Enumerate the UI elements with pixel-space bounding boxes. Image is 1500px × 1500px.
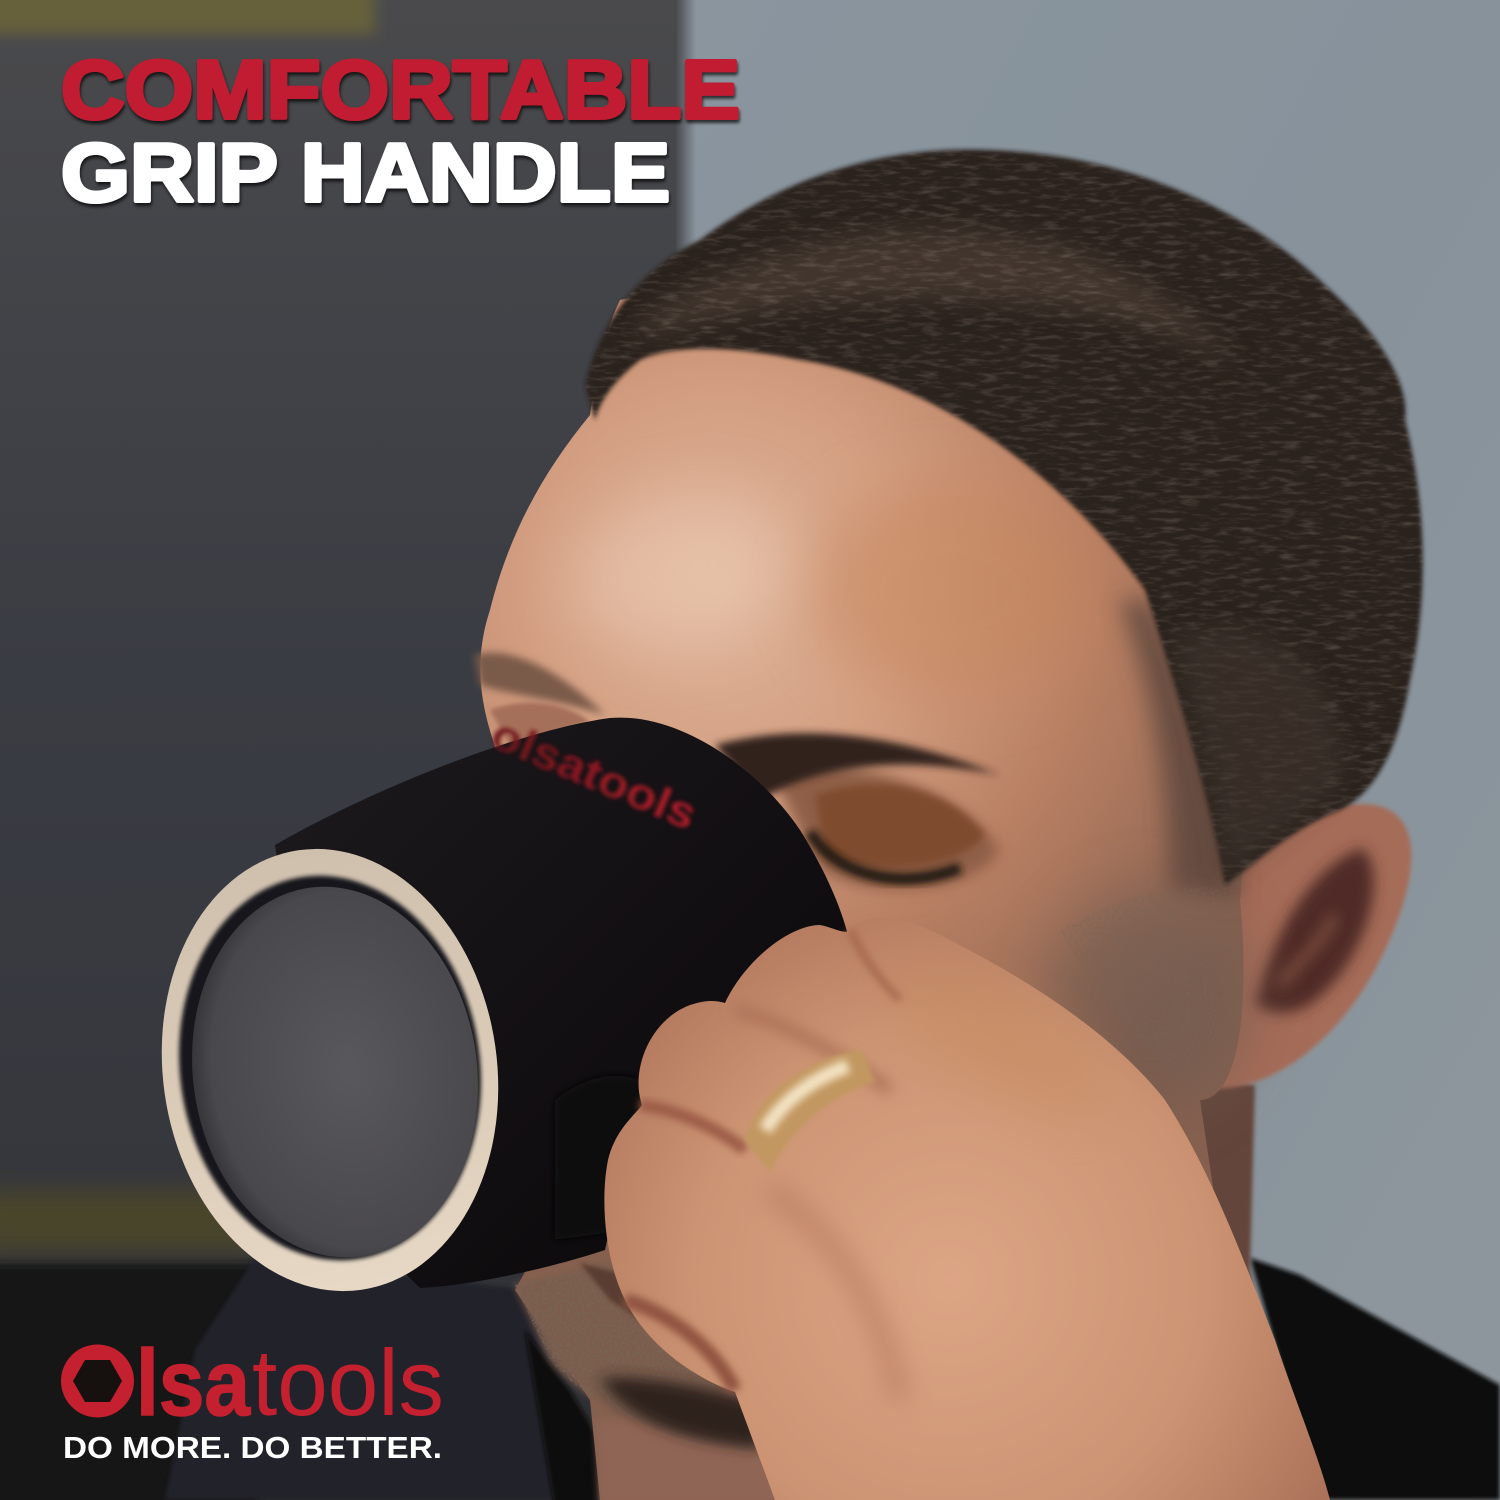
knuckle glow: [876, 945, 1124, 1135]
gold ring: [745, 1050, 875, 1172]
shirt: right shoulder: [1250, 1258, 1500, 1500]
mug body: [275, 718, 848, 1288]
forehead warm patch: [810, 480, 1090, 700]
title: [61, 43, 740, 219]
background: gold strip at top: [0, 0, 375, 34]
mug handle: [555, 1076, 650, 1240]
title line 2: GRIP HANDLE: [61, 126, 670, 219]
title line 1: COMFORTABLE: [61, 43, 740, 136]
logo: [61, 1330, 444, 1465]
eyelid: [815, 785, 985, 867]
left eye shadow: [490, 703, 590, 745]
eyebrow left: [475, 653, 605, 715]
logo hex O: [61, 1344, 134, 1418]
hair highlights: [640, 229, 1240, 370]
cheek stubble texture: [1060, 887, 1242, 1095]
eye socket: [770, 765, 1000, 890]
hand: [604, 917, 1330, 1500]
mug rim: [134, 827, 526, 1313]
neck: [1150, 1075, 1300, 1500]
chin stubble texture: [515, 1262, 770, 1450]
mug brand print: olsatools: [484, 709, 704, 839]
forehead highlight: [557, 474, 803, 666]
hair strand texture: [585, 150, 1423, 885]
ear: [1205, 804, 1411, 1089]
background: dark floor low left: [0, 1264, 260, 1500]
mug: [134, 709, 848, 1313]
beard shadow band: [600, 1377, 768, 1448]
background: olive band low left: [0, 1190, 260, 1252]
moustache: [580, 1263, 640, 1320]
background wall: dark left: [0, 0, 676, 1500]
mug bottom: [168, 868, 502, 1276]
eyebrow right: [715, 733, 1000, 800]
cheek stubble shade: [1050, 890, 1250, 1110]
shadow bottom of hand: [770, 1190, 900, 1400]
face skin: [480, 292, 1260, 1500]
hand shape: [604, 917, 1330, 1500]
shirt: left shoulder: [165, 1258, 570, 1500]
mug inside wall: [155, 856, 505, 1280]
shirt: collar shadow: [525, 1330, 600, 1500]
eyelash line: [810, 832, 960, 879]
fade at temple: [1170, 628, 1345, 880]
logo tagline: DO MORE. DO BETTER.: [63, 1430, 442, 1465]
finger shade 2: [735, 1010, 890, 1090]
lower neck: [596, 1420, 800, 1500]
finger shade 1: [640, 1105, 745, 1150]
temple shade: [1120, 600, 1240, 900]
background wall: light right: [670, 0, 1500, 1500]
finger shade 3: [625, 1300, 735, 1390]
chin skin: [515, 1262, 770, 1450]
background soft edge between walls: [676, 0, 696, 400]
logo wordmark light: tools: [252, 1330, 444, 1435]
logo wordmark bold: lsa: [136, 1330, 251, 1435]
head group: [475, 150, 1423, 1500]
hair: [585, 150, 1423, 885]
thumb crease: [850, 930, 900, 1000]
